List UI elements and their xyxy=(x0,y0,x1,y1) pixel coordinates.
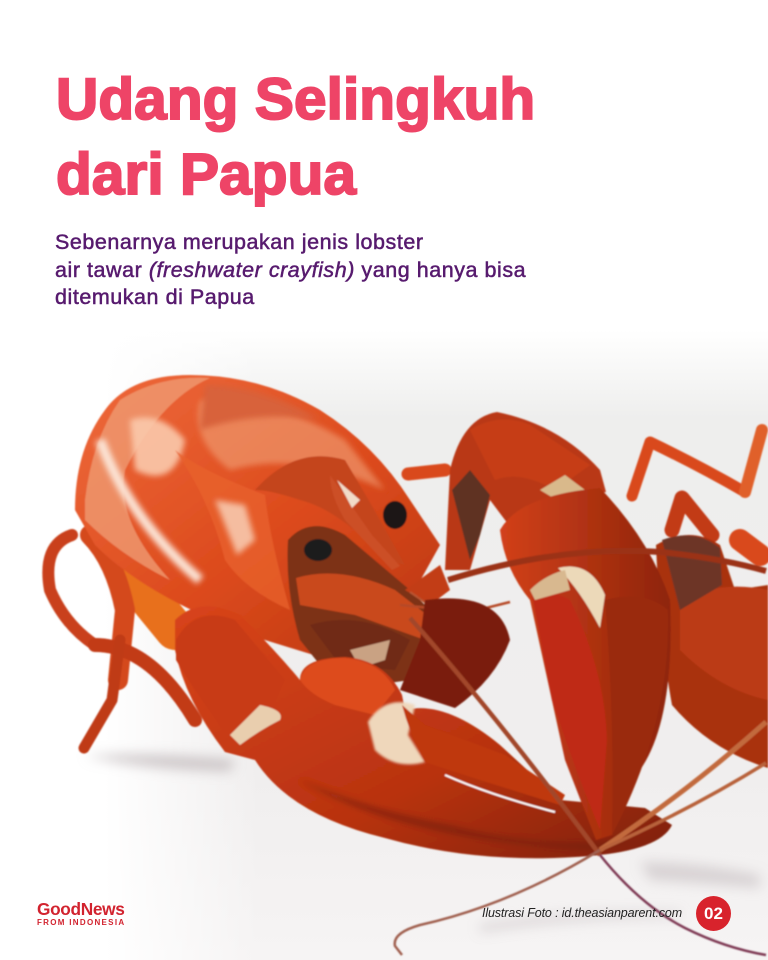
subtitle text: air tawar (freshwater crayfish) yang hanya bisa xyxy=(55,258,526,282)
carapace xyxy=(75,375,440,660)
eyes and mouth parts xyxy=(288,501,510,690)
table shadows xyxy=(85,755,760,932)
right rear claw xyxy=(656,535,768,768)
front claw upright xyxy=(445,412,671,840)
title: dari Papua xyxy=(56,142,356,207)
logo: GoodNews from Indonesia: FROM INDONESIA xyxy=(37,918,125,926)
subtitle text xyxy=(55,230,526,309)
antennae xyxy=(395,551,766,955)
logo: GoodNews from Indonesia: GoodNews xyxy=(37,899,124,919)
title: Udang Selingkuh xyxy=(56,67,535,132)
right rear legs xyxy=(408,430,762,555)
left walking legs xyxy=(48,535,195,748)
page number badge xyxy=(696,896,731,931)
page number badge: 02 xyxy=(704,904,723,923)
front claw large xyxy=(175,598,672,858)
subtitle text: Sebenarnya merupakan jenis lobster xyxy=(55,230,424,254)
subtitle text: ditemukan di Papua xyxy=(55,285,255,309)
studio background xyxy=(0,330,768,960)
photo credit: Ilustrasi Foto : id.theasianparent.com xyxy=(482,906,682,920)
title xyxy=(56,67,535,207)
